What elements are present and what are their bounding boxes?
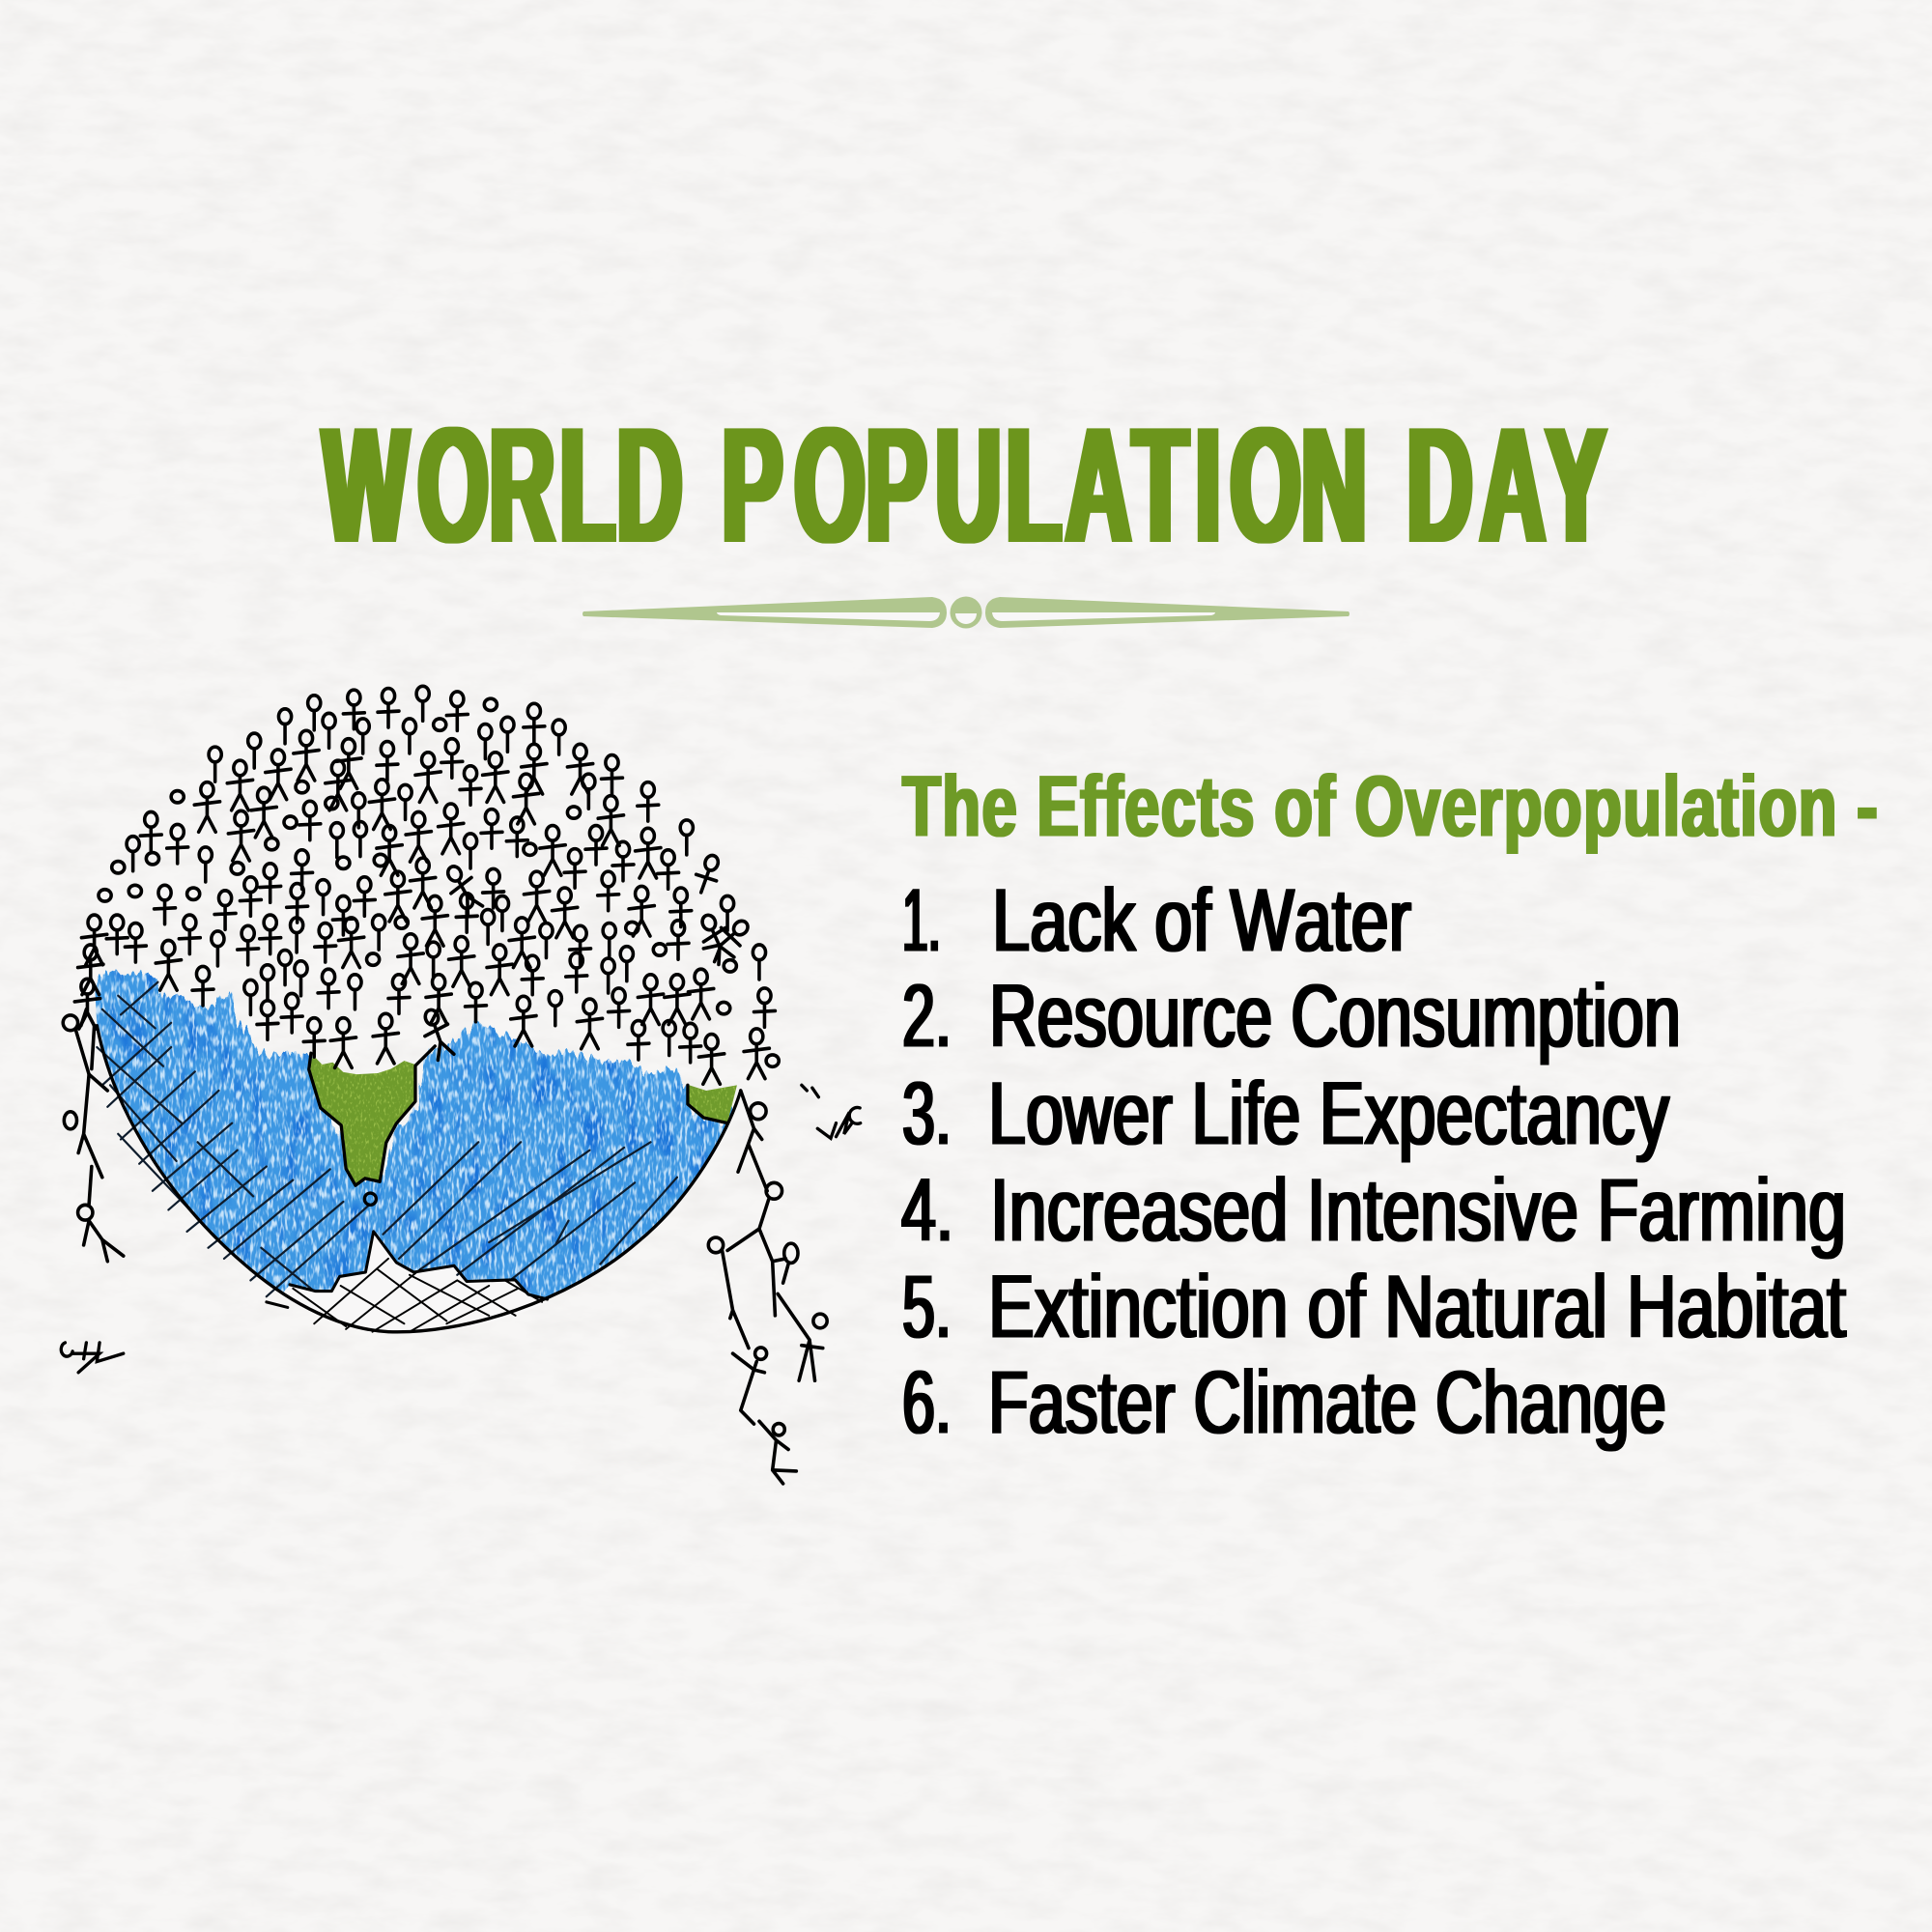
- list item 3: Lower Life Expectancy: [988, 1065, 1669, 1163]
- continent: small landmass: [688, 1085, 737, 1123]
- effects list: [901, 871, 1846, 1452]
- list item 1: [902, 871, 1411, 970]
- figures climbing down the left side: [63, 1009, 124, 1262]
- list item 6: Faster Climate Change: [988, 1353, 1666, 1452]
- ice cap: [282, 1232, 548, 1332]
- list item 6: [902, 1353, 1666, 1452]
- ornament divider: [582, 597, 1350, 628]
- title: [323, 393, 1606, 578]
- list item 6: 6.: [902, 1353, 952, 1452]
- list item 5: 5.: [902, 1258, 952, 1356]
- list item 2: [902, 967, 1681, 1065]
- continent: Africa: [309, 1055, 415, 1185]
- list item 2: Resource Consumption: [989, 967, 1681, 1065]
- list item 3: 3.: [902, 1065, 952, 1163]
- figures climbing down the right side: [708, 1091, 827, 1484]
- illustration: overcrowded globe: [61, 686, 861, 1484]
- ice cap outline with crosshatch: [267, 1232, 548, 1332]
- list item 2: 2.: [902, 967, 952, 1065]
- title: DAY: [1407, 393, 1606, 578]
- title: WORLD: [323, 393, 682, 578]
- globe outline with coastlines: [97, 1026, 741, 1332]
- list item 1: 1.: [902, 871, 941, 970]
- crowd of stick figures: [74, 686, 779, 1084]
- list item 3: [902, 1065, 1669, 1163]
- list item 1: Lack of Water: [992, 871, 1411, 970]
- list item 4: 4.: [901, 1161, 953, 1260]
- hatching lines over ocean: [97, 982, 677, 1296]
- ocean: [95, 969, 738, 1299]
- fallen figure fragment bottom-left: [61, 1343, 124, 1373]
- fallen figure fragment right: [802, 1085, 861, 1138]
- title: POPULATION: [722, 393, 1367, 578]
